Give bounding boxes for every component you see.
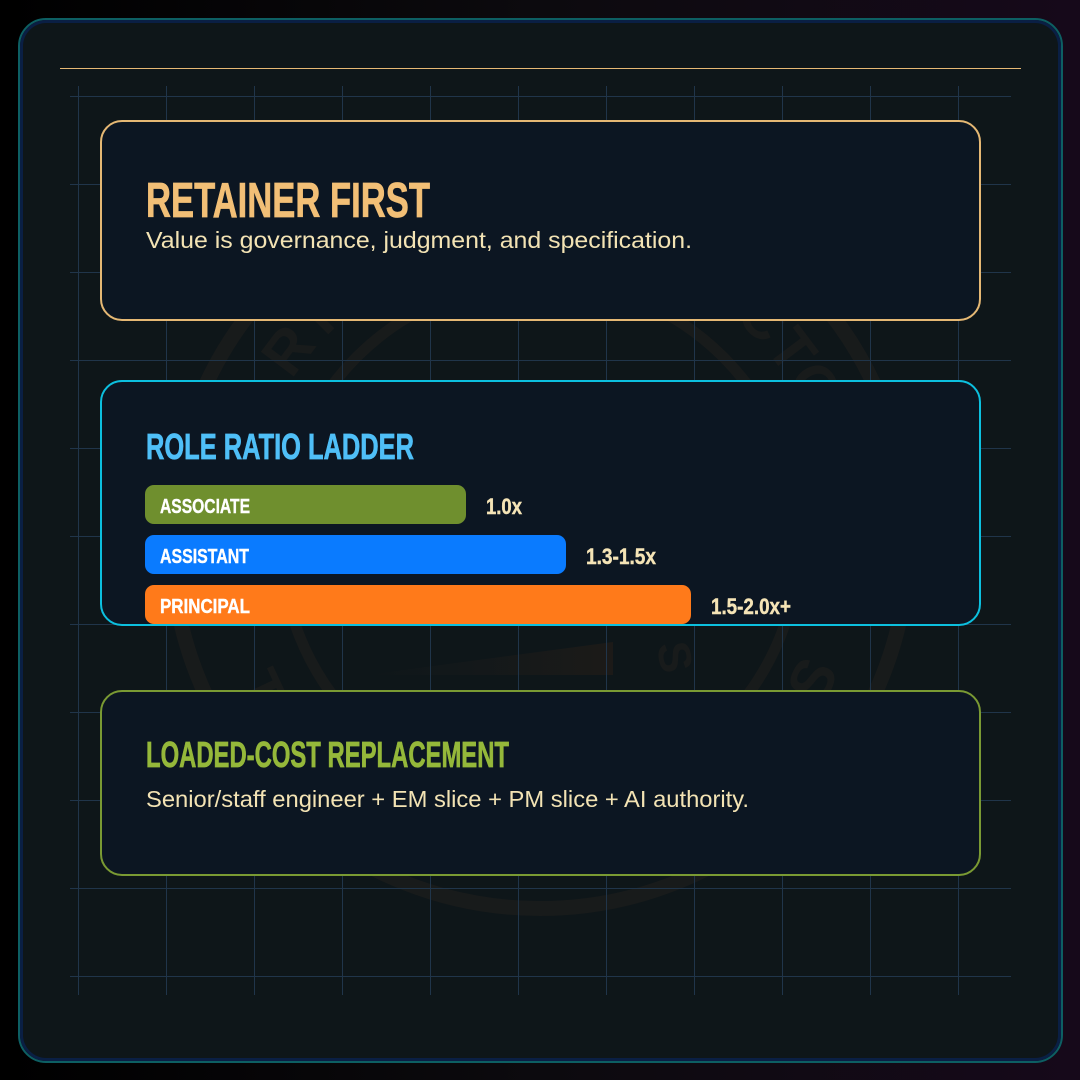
watermark seal: T — [223, 659, 300, 721]
bar: principal: PRINCIPAL — [160, 596, 250, 618]
watermark seal: R — [248, 313, 328, 388]
heading: loaded-cost replacement: LOADED-COST REPLACEMENT — [146, 734, 509, 775]
text: retainer description: Value is governance, judgment, and specification. — [146, 227, 692, 253]
watermark seal: I — [287, 287, 346, 346]
heading: retainer first: RETAINER FIRST — [146, 174, 430, 228]
text: replacement description: Senior/staff engineer + EM slice + PM slice + AI authority. — [146, 786, 749, 812]
panel: retainer first — [101, 121, 980, 320]
watermark seal: C — [724, 278, 802, 356]
blueprint grid — [70, 86, 1011, 995]
watermark seal: S — [774, 647, 851, 713]
bar: associate: ASSOCIATE — [160, 496, 250, 518]
top rule — [60, 68, 1021, 69]
value: assistant ratio: 1.3-1.5x — [586, 544, 657, 569]
watermark seal — [172, 172, 908, 908]
panel: role ratio ladder — [101, 381, 980, 625]
watermark seal: S — [647, 637, 703, 677]
bar: associate — [145, 485, 466, 524]
watermark seal: O — [775, 350, 857, 424]
value: associate ratio: 1.0x — [486, 494, 523, 519]
bar: assistant — [145, 535, 566, 574]
value: principal ratio: 1.5-2.0x+ — [711, 594, 791, 619]
bar: principal — [145, 585, 691, 624]
bar: assistant: ASSISTANT — [160, 546, 249, 568]
watermark seal: T — [754, 315, 830, 385]
panel: loaded-cost replacement — [101, 691, 980, 875]
heading: role ratio ladder: ROLE RATIO LADDER — [146, 426, 414, 467]
